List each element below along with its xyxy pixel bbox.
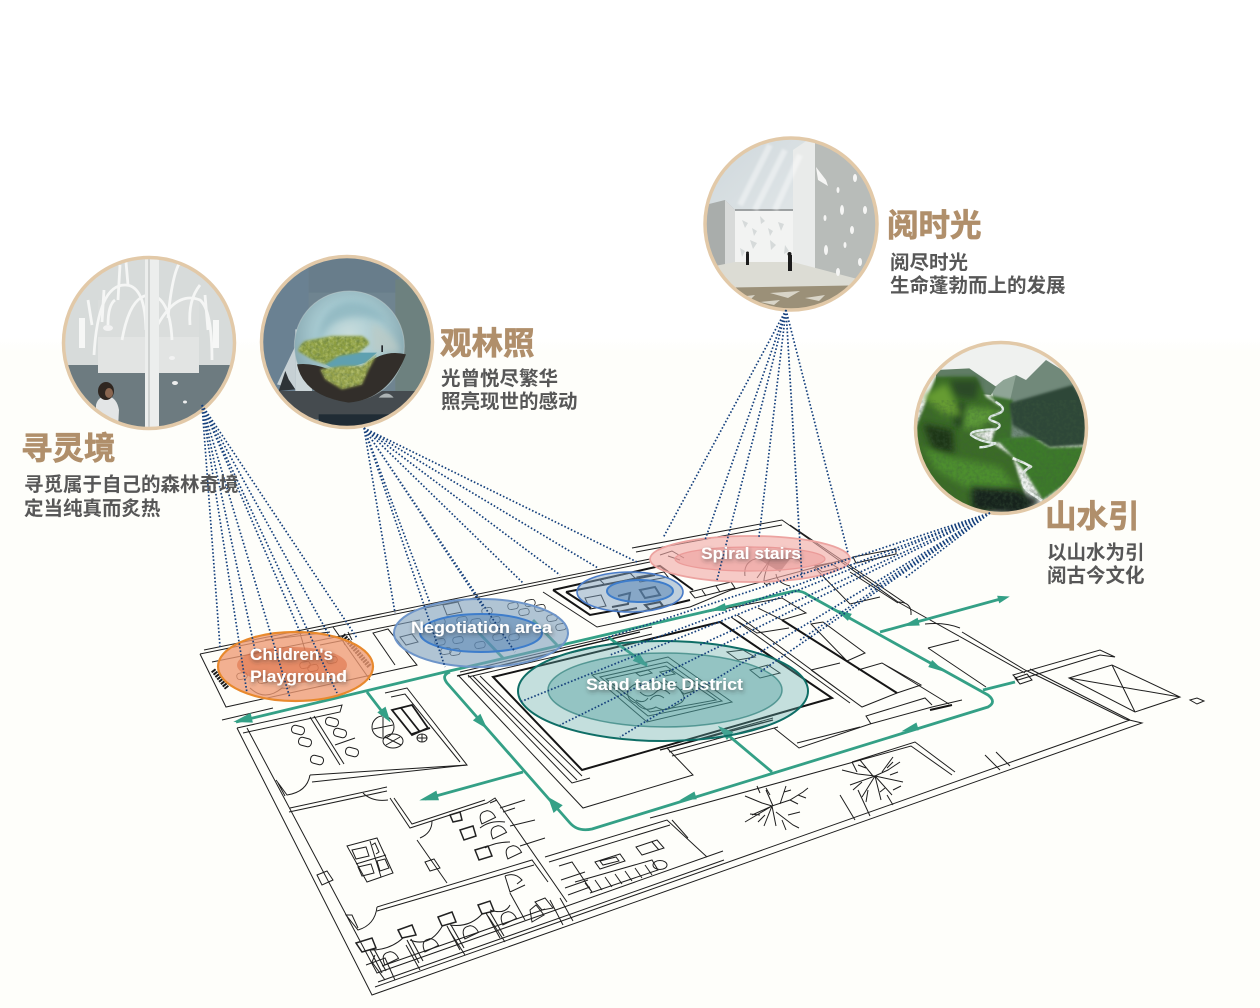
heading: 寻灵境: 寻觅属于自己的森林奇境: [24, 473, 239, 496]
heading: 山水引: 山水引: [1045, 498, 1140, 534]
heading: 寻灵境: [21, 430, 239, 520]
heading: 观林照: [440, 325, 578, 413]
label: Sand table District: Sand table District: [586, 675, 743, 694]
heading: 观林照: 照亮现世的感动: [441, 390, 578, 413]
label: Children's Playground: Children's: [250, 645, 333, 664]
heading: 山水引: 阅古今文化: [1047, 564, 1145, 587]
furniture in negotiation area and lounge: [236, 572, 668, 695]
trees: [745, 757, 903, 830]
zone: lounge ellipses: [577, 572, 683, 612]
dotted leader lines: 观林照: [364, 428, 637, 667]
heading: 山水引: 以山水为引: [1047, 542, 1145, 564]
heading: 阅时光: [887, 207, 1066, 297]
photo: white gallery with dappled light: [700, 135, 885, 315]
zone: Sand table District ellipses: [518, 641, 808, 741]
label: Spiral stairs: Spiral stairs: [701, 544, 801, 563]
heading: 阅时光: 生命蓬勃而上的发展: [890, 274, 1066, 297]
stair hatch in children's zone: [213, 635, 370, 688]
heading: 阅时光: 阅尽时光: [890, 252, 968, 274]
photo: forest of white arches: [60, 255, 240, 435]
zone: Negotiation area ellipses: [394, 599, 568, 667]
label: Children's Playground: Playground: [250, 667, 347, 686]
zone: Spiral stairs ellipses: [650, 536, 850, 582]
photo: glass sphere with mossy island: [259, 253, 439, 433]
sand table hall: [458, 598, 962, 895]
heading: 寻灵境: 定当纯真而炙热: [24, 497, 161, 520]
heading: 阅时光: 阅时光: [887, 207, 982, 243]
arrowheads: [232, 593, 1011, 813]
heading: 观林照: 光曾悦尽繁华: [441, 368, 558, 390]
heading: 山水引: [1045, 498, 1145, 587]
circulation route arrows: [232, 591, 1015, 830]
outer walls: [200, 520, 1204, 995]
dotted leader lines: 山水引: [520, 513, 990, 737]
sand table model: [592, 650, 780, 722]
label: Negotiation area: Negotiation area: [411, 618, 553, 637]
washrooms: [371, 800, 553, 980]
floor plan line drawing: [200, 520, 1204, 995]
photo: green valley with river: [913, 337, 1093, 520]
zone: Children's Playground ellipses: [218, 632, 373, 701]
lower left rooms: [222, 688, 567, 930]
label: Children's Playground: [250, 645, 347, 686]
heading: 观林照: 观林照: [440, 325, 535, 361]
spiral stairs drawing: [660, 551, 838, 586]
heading: 寻灵境: 寻灵境: [21, 430, 116, 466]
dotted leader lines: 阅时光: [663, 310, 848, 580]
dotted leader lines: 寻灵境: [202, 405, 357, 698]
